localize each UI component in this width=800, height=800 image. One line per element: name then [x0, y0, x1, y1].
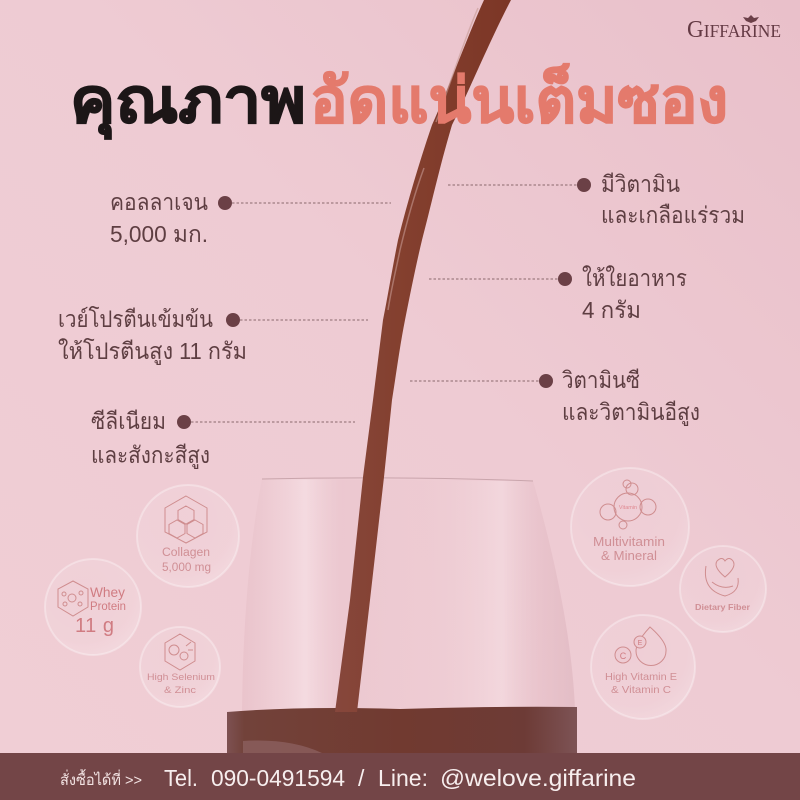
- badge: whey protein: [45, 559, 141, 655]
- pouring stream: [335, 0, 511, 712]
- footer order label: สั่งซื้อได้ที่ >>: [60, 769, 142, 789]
- callout: whey protein: เวย์โปรตีนเข้มข้น: [58, 306, 213, 332]
- badge: multivitamin and mineral: Multivitamin: [593, 535, 665, 549]
- footer line id: @welove.giffarine: [440, 765, 636, 791]
- callout: whey protein: ให้โปรตีนสูง 11 กรัม: [58, 338, 247, 365]
- callout: dietary fiber: [429, 265, 687, 323]
- badge: selenium and zinc: & Zinc: [164, 685, 196, 696]
- callout: multivitamin and mineral: มีวิตามิน: [601, 171, 680, 197]
- icon: collagen hexagon: [165, 496, 207, 543]
- title coral part: อัดแน่นเต็มซอง: [310, 63, 728, 136]
- badge: multivitamin and mineral: [571, 468, 689, 586]
- badge: dietary fiber: [680, 546, 766, 632]
- badge: dietary fiber: Dietary Fiber: [695, 602, 751, 612]
- badge: vitamin E and C: High Vitamin E: [605, 671, 677, 683]
- badge: vitamin E and C: & Vitamin C: [611, 684, 671, 696]
- badge: collagen: 5,000 mg: [162, 562, 211, 574]
- callout: vitamin C and E: วิตามินซี: [562, 367, 640, 393]
- badge: whey protein: Whey: [90, 584, 125, 600]
- badge: whey protein: 11 g: [75, 615, 114, 637]
- stream highlight: [388, 8, 478, 310]
- badge: selenium and zinc: High Selenium: [147, 672, 215, 683]
- glass rim: [262, 478, 533, 481]
- logo: Giffarine: [687, 15, 781, 43]
- glass of chocolate drink: [227, 478, 577, 753]
- callout: selenium and zinc: และสังกะสีสูง: [91, 442, 210, 469]
- badge: multivitamin and mineral: & Mineral: [601, 549, 657, 563]
- callout: multivitamin and mineral: และเกลือแร่รวม: [601, 202, 745, 228]
- pale reflection in drink: [243, 740, 322, 753]
- icon: vitamin drops: E: [638, 640, 643, 647]
- logo wordmark: GIFFARINE: [687, 17, 781, 43]
- callout: vitamin C and E: และวิตามินอีสูง: [562, 399, 700, 426]
- logo emblem: [743, 15, 759, 23]
- callout: collagen: [110, 189, 391, 247]
- icon: vitamin atoms: [600, 480, 656, 529]
- callout: collagen: คอลลาเจน: [110, 189, 208, 215]
- callout: whey protein: [58, 306, 368, 365]
- footer line id: Line:: [378, 765, 428, 791]
- icon: selenium zinc hexagon: [165, 634, 195, 670]
- footer bar: [0, 753, 800, 800]
- badge: vitamin E and C: [591, 615, 695, 719]
- callout: selenium and zinc: [91, 408, 355, 469]
- callout: collagen: 5,000 มก.: [110, 221, 208, 247]
- title black part: คุณภาพ: [70, 67, 306, 139]
- icon: molecule hexagon: [58, 581, 88, 616]
- badge: selenium and zinc: [140, 627, 220, 707]
- glass bowl: [242, 479, 575, 753]
- callout: dietary fiber: ให้ใยอาหาร: [582, 265, 687, 291]
- drink in glass: [227, 707, 577, 753]
- callout: selenium and zinc: ซีลีเนียม: [91, 408, 166, 434]
- badge: multivitamin and mineral: Vitamin: [619, 505, 637, 511]
- callout: vitamin C and E: [410, 367, 700, 426]
- icon: vitamin drops: C: [620, 651, 627, 661]
- callout: multivitamin and mineral: [448, 171, 745, 228]
- footer slash: /: [358, 765, 365, 791]
- icon: vitamin drops: [615, 627, 666, 666]
- footer phone: Tel.: [164, 765, 198, 791]
- callout: dietary fiber: 4 กรัม: [582, 297, 641, 323]
- title: [70, 63, 728, 139]
- footer phone: 090-0491594: [211, 765, 345, 791]
- badge: whey protein: Protein: [90, 601, 126, 613]
- icon: heart in hands: [705, 558, 738, 596]
- badge: collagen: [137, 485, 239, 587]
- badge: collagen: Collagen: [162, 547, 210, 559]
